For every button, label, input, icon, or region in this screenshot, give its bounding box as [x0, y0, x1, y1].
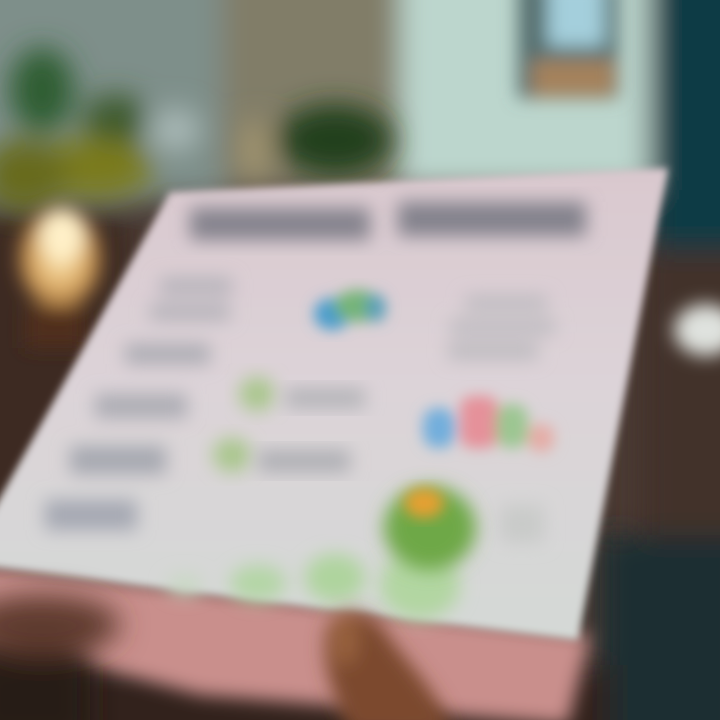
green lower blobs — [167, 554, 365, 602]
right text column — [448, 296, 555, 543]
small green icon and text row one — [239, 377, 365, 411]
center thumb — [325, 612, 452, 720]
coloured bars chart — [423, 396, 554, 452]
sheet title — [190, 202, 586, 240]
white object at right — [674, 304, 720, 356]
blue green icon — [314, 290, 386, 330]
picture frame on wall — [518, 0, 618, 98]
green pie chart with orange slice — [380, 486, 476, 619]
pink paper strip at bottom — [0, 565, 590, 720]
plant in background — [0, 48, 393, 211]
small green icon and text row two — [213, 438, 350, 472]
left finger — [0, 595, 120, 720]
infographic sheet — [0, 168, 668, 640]
candle glow — [18, 206, 102, 348]
left text column — [45, 278, 232, 530]
